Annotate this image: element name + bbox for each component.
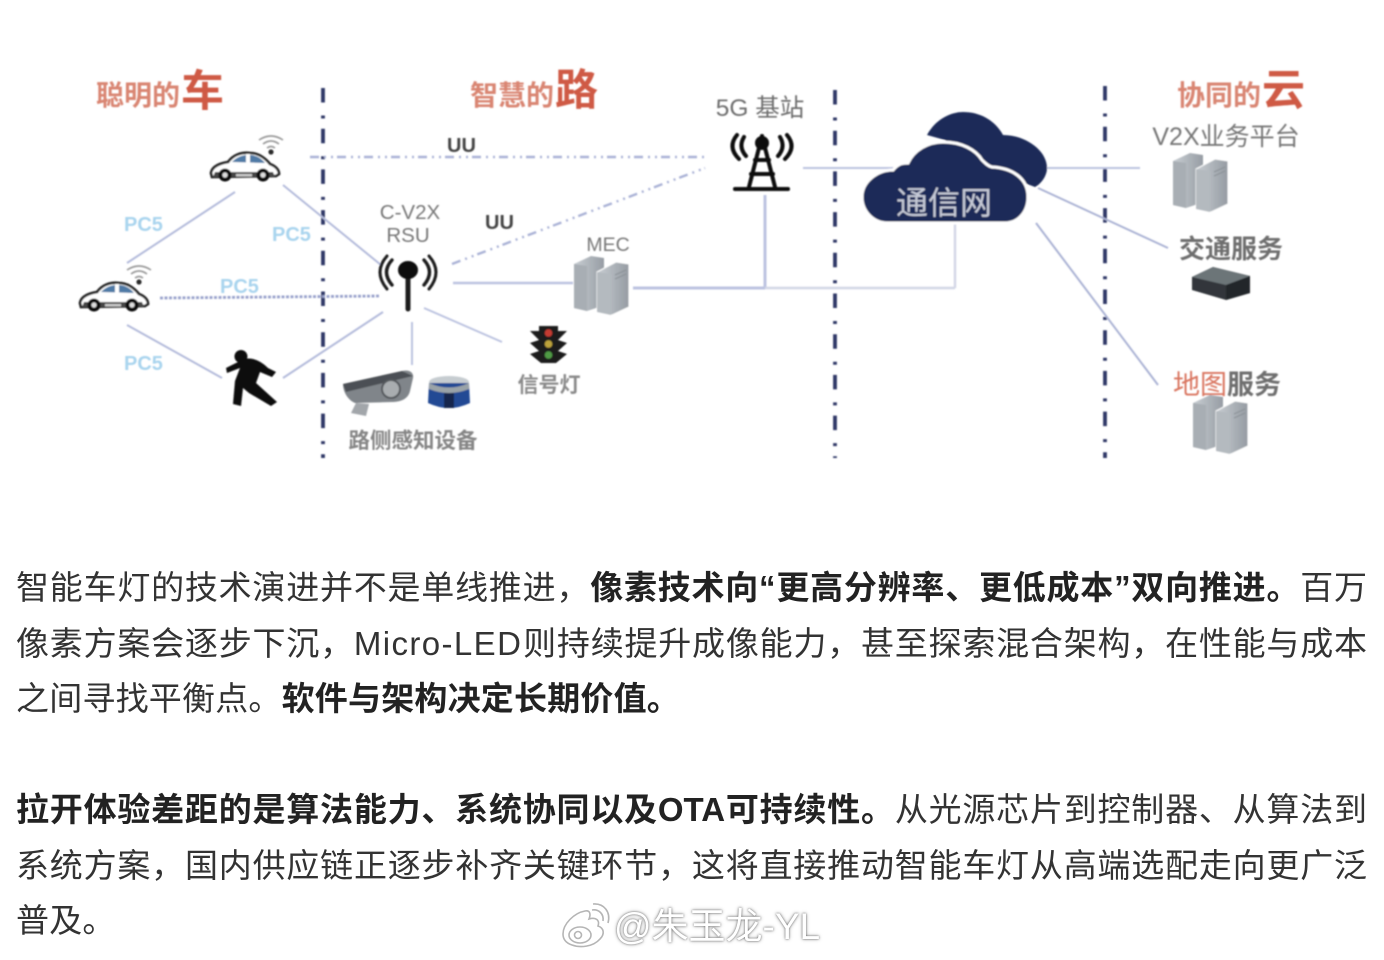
paragraph 1 line 1: 智能车灯的技术演进并不是单线推进，像素技术向“更高分辨率、更低成本”双向推进。百万: [16, 569, 1367, 606]
zone divider: car / road: [321, 88, 325, 458]
label: V2X platform: V2X业务平台: [1152, 123, 1300, 151]
PC5 links between vehicles, pedestrian and RSU: [127, 185, 383, 378]
icon: communication network cloud: [862, 112, 1047, 223]
heading: smart road: 智慧的路: [470, 67, 598, 115]
paragraph 1 line 2: 像素方案会逐步下沉，Micro-LED则持续提升成像能力，甚至探索混合架构，在性能与成本: [16, 625, 1367, 662]
label: UU diagonal: UU: [485, 212, 514, 234]
paragraph 1 line 3: 之间寻找平衡点。软件与架构决定长期价值。: [16, 680, 680, 717]
paragraph 2 line 3: 普及。: [16, 902, 116, 939]
watermark: @朱玉龙-YL: [614, 906, 820, 947]
label: traffic light: 信号灯: [518, 374, 580, 397]
paragraph 2 line 2: 系统方案，国内供应链正逐步补齐关键环节，这将直接推动智能车灯从高端选配走向更广泛: [16, 847, 1367, 884]
label: C-V2X RSU: RSU: [386, 224, 430, 247]
network architecture diagram: [78, 67, 1305, 460]
label: 5G base station: 5G 基站: [716, 94, 804, 122]
heading: smart car: 车: [181, 68, 224, 116]
icon: weibo logo: [562, 903, 610, 948]
label: PC5 middle: PC5: [220, 276, 259, 298]
icon: lidar sensor: [428, 376, 470, 408]
zone divider: road / cloud: [833, 90, 837, 458]
heading: collaborative cloud: 协同的云: [1177, 67, 1305, 115]
wired backbone links: [412, 168, 1168, 385]
heading: smart car: 聪明的: [96, 80, 180, 111]
icon: pedestrian: [226, 350, 277, 406]
icon: car top: [211, 136, 283, 182]
Uu dashed links: [310, 157, 705, 264]
paragraph 2 line 1: 拉开体验差距的是算法能力、系统协同以及OTA可持续性。从光源芯片到控制器、从算法到: [16, 791, 1367, 828]
label: UU top: UU: [447, 135, 476, 157]
label: map service: 地图服务: [1173, 370, 1281, 400]
zone divider: network / cloud services: [1103, 86, 1107, 458]
icon: map service servers: [1193, 395, 1248, 454]
icon: 5G tower: [732, 135, 792, 189]
icon: V2X platform servers: [1173, 153, 1228, 212]
label: PC5 top right: PC5: [272, 224, 311, 246]
icon: car left: [80, 266, 151, 312]
icon: roadside camera: [343, 370, 413, 416]
icon: C-V2X RSU antenna: [380, 256, 436, 309]
label: C-V2X RSU: C-V2X: [380, 201, 441, 224]
label: MEC: MEC: [586, 234, 630, 256]
label: PC5 top left: PC5: [124, 214, 163, 236]
label: PC5 bottom: PC5: [124, 353, 163, 375]
icon: MEC servers: [574, 256, 629, 315]
label: roadside sensing equipment: 路侧感知设备: [348, 428, 478, 453]
icon: traffic service server: [1192, 267, 1250, 300]
label: communication network: 通信网: [896, 185, 992, 221]
icon: traffic light: [530, 326, 567, 363]
label: traffic service: 交通服务: [1179, 234, 1283, 264]
